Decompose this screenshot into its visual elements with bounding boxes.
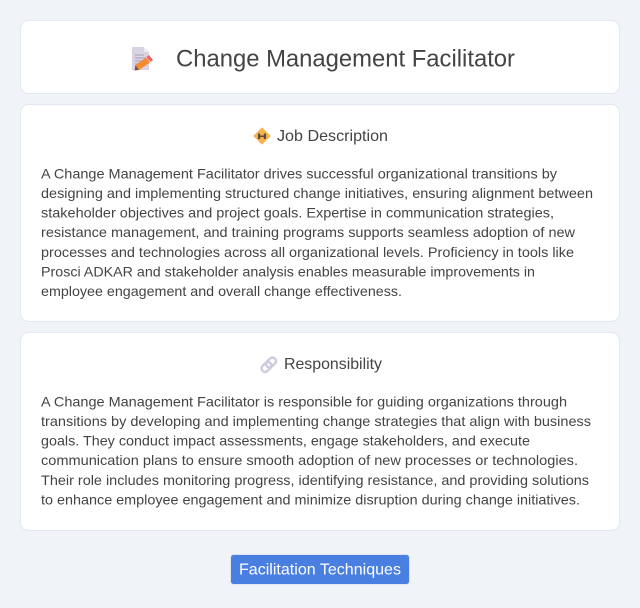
text block: job description xyxy=(41,165,593,299)
panel: job description xyxy=(20,104,620,322)
heading: title: Change Management Facilitator xyxy=(176,46,515,72)
text block: responsibility: goals. They conduct impact assessments, engage stakeholders, and execute xyxy=(41,433,530,449)
heading: responsibility: Responsibility xyxy=(284,356,382,373)
text block: job description: resistance management, and training programs supports seamless adoption of new xyxy=(41,224,576,240)
icon: chain link xyxy=(260,356,277,373)
text block: responsibility: to enhance employee engagement and minimize disruption during change initiatives. xyxy=(41,491,580,507)
text block: responsibility: A Change Management Facilitator is responsible for guiding organizations through xyxy=(41,393,567,409)
text block: responsibility: transitions by developing and implementing change strategies that align with business xyxy=(41,413,591,429)
text block: job description: employee engagement and overall change effectiveness. xyxy=(41,283,402,299)
text block: responsibility: communication plans to ensure smooth adoption of new processes or technologies. xyxy=(41,452,578,468)
text block: job description: processes and technologies across all organizational levels. Proficiency in tools like xyxy=(41,244,574,260)
text block: job description: stakeholder objectives and project goals. Expertise in communication strategies, xyxy=(41,205,554,221)
panel: title xyxy=(20,20,620,94)
heading: job description: Job Description xyxy=(277,128,388,145)
icon: document with pencil xyxy=(132,47,153,70)
text block: responsibility xyxy=(41,393,591,507)
text block: job description: A Change Management Facilitator drives successful organizational transitions by xyxy=(41,165,557,181)
panel: responsibility xyxy=(20,332,620,530)
text block: job description: Prosci ADKAR and stakeholder analysis enables measurable improvements in xyxy=(41,263,535,279)
button: facilitation techniques: Facilitation Techniques xyxy=(239,561,401,578)
icon: orange diamond sign xyxy=(254,128,270,144)
text block: job description: designing and implementing structured change initiatives, ensuring alignment between xyxy=(41,185,593,201)
text block: responsibility: Their role includes monitoring progress, identifying resistance, and providing solutions xyxy=(41,472,589,488)
button: facilitation techniques xyxy=(230,554,410,584)
